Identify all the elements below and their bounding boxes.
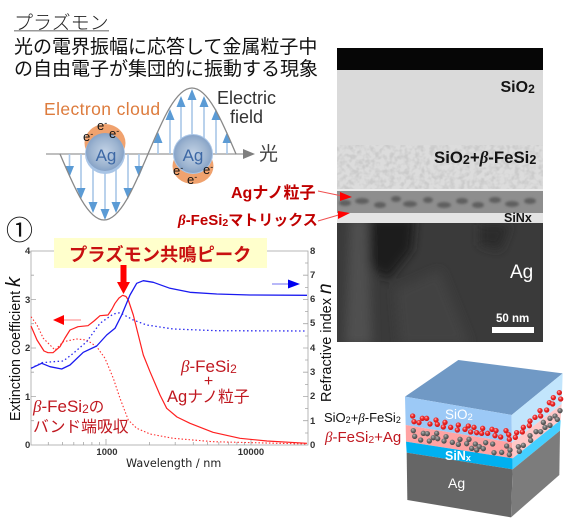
TEM layer labels: β-FeSi — [480, 148, 529, 167]
annotation: beta-FeSi2 + Ag nanoparticles: Agナノ粒子 — [167, 384, 250, 407]
3D layer stack diagram — [324, 360, 563, 517]
tick labels — [25, 246, 316, 458]
annotation: band edge absorption — [32, 395, 129, 437]
annotation: band edge absorption: 2 — [82, 402, 89, 416]
Ag particle right — [172, 134, 214, 187]
electric field label: field — [230, 107, 263, 127]
layer label: SiO2 + beta-FeSi2: β-FeSi — [358, 410, 396, 425]
left pointing red arrow — [53, 315, 81, 325]
scale bar: 50 nm — [496, 313, 529, 325]
tick labels: 1 — [25, 392, 31, 403]
tick labels: 2 — [25, 343, 30, 354]
tick labels: 6 — [310, 294, 315, 305]
text block: plasmon definition — [14, 32, 318, 81]
layer label: SiO2 + beta-FeSi2: 2 — [346, 415, 351, 425]
gray particles — [411, 408, 563, 457]
right pointing blue arrow — [272, 280, 300, 288]
Ag particle left — [83, 118, 126, 174]
layer label: beta-FeSi2 + Ag: +Ag — [374, 429, 401, 446]
Ag particle left: e — [83, 129, 90, 144]
sine wave — [60, 88, 236, 220]
SiO2 layer label: 2 — [468, 412, 473, 423]
layer label: SiO2 + beta-FeSi2: 2 — [396, 415, 401, 425]
y axis title right: Refractive index n — [315, 283, 336, 402]
tick labels: 4 — [310, 343, 316, 354]
tick labels: 0 — [25, 440, 30, 451]
Ag particle right: e — [187, 172, 194, 187]
Ag particle left: e — [97, 118, 104, 133]
TEM layer labels: + — [470, 148, 480, 167]
peak arrow — [117, 265, 130, 294]
annotation: beta-FeSi2 + Ag nanoparticles: 2 — [230, 362, 237, 376]
right face layers — [512, 373, 563, 443]
tick labels: 3 — [310, 367, 315, 378]
curve: red solid k — [31, 295, 307, 443]
Ag particle left: - — [90, 129, 93, 139]
callout: nanoparticle and matrix labels with arrows: 2 — [222, 217, 228, 229]
callout: nanoparticle and matrix labels with arrows: マトリックス — [228, 209, 318, 230]
TEM micrograph — [337, 48, 543, 345]
annotation: beta-FeSi2 + Ag nanoparticles: β-FeSi — [181, 357, 230, 376]
Ag particle right: - — [194, 172, 197, 182]
TEM layer labels: SiO — [434, 148, 463, 167]
Ag particle right: - — [180, 163, 183, 173]
annotation: band edge absorption: バンド端吸収 — [33, 414, 129, 437]
curve: blue dotted n — [31, 313, 307, 368]
Ag particle right: e — [173, 163, 180, 178]
circled number: ① — [6, 209, 33, 248]
tick labels: 1000 — [96, 447, 118, 458]
electron cloud label: Electron cloud — [44, 99, 160, 119]
layer label: SiO2 + beta-FeSi2: + — [351, 410, 358, 425]
TEM layer labels: 2 — [463, 153, 470, 167]
annotation: beta-FeSi2 + Ag nanoparticles — [167, 357, 250, 407]
layer label: beta-FeSi2 + Ag: 2 — [368, 434, 374, 446]
callout: nanoparticle and matrix labels with arrows — [177, 179, 352, 230]
tick labels: 10000 — [238, 447, 264, 458]
TEM layer labels: SiO — [500, 79, 528, 96]
annotation: beta-FeSi2 + Ag nanoparticles: + — [204, 373, 213, 390]
Ag particle right: - — [210, 162, 213, 172]
top face — [405, 360, 563, 415]
Ag particle left: - — [116, 126, 119, 136]
axes — [31, 251, 308, 445]
front face layers — [405, 397, 512, 443]
scale bar — [492, 313, 534, 333]
Ag particle left: e — [109, 126, 116, 141]
text block: plasmon definition: の自由電子が集団的に振動する現象 — [14, 54, 318, 81]
Ag particle right: e — [203, 162, 210, 177]
title: プラズモン — [14, 8, 109, 35]
curves — [31, 281, 307, 444]
TEM layer labels: SiNx — [504, 211, 532, 225]
callout: plasmon resonance peak: プラズモン共鳴ピーク — [69, 241, 251, 267]
annotation: band edge absorption: β-FeSi — [33, 397, 82, 416]
layer label: beta-FeSi2 + Ag: β-FeSi — [325, 429, 368, 446]
curve: red dotted k — [31, 317, 307, 444]
electric field label — [217, 88, 276, 127]
tick labels: 7 — [310, 270, 315, 281]
layer label: SiO2 + beta-FeSi2: SiO — [324, 410, 346, 425]
tick labels: 0 — [310, 440, 315, 451]
Ag label: Ag — [510, 262, 533, 283]
light label: 光 — [259, 139, 278, 166]
Ag particle left: - — [104, 118, 107, 128]
SiNx layer label: x — [466, 453, 471, 463]
light axis arrow — [46, 149, 255, 159]
tick labels: 5 — [310, 318, 316, 329]
Ag particle right: Ag — [183, 146, 203, 165]
TEM layer labels: 2 — [528, 82, 535, 96]
callout: nanoparticle and matrix labels with arrows: β-FeSi — [178, 212, 222, 229]
chart: extinction coefficient and refractive index vs wavelength — [3, 238, 336, 470]
SiO2 layer label: SiO — [445, 407, 468, 422]
callout: nanoparticle and matrix labels with arrows: Agナノ粒子 — [231, 179, 316, 203]
tick labels: 2 — [310, 391, 315, 402]
x axis title: Wavelength / nm — [126, 457, 221, 470]
tick labels: 3 — [25, 295, 30, 306]
TEM layer labels — [434, 79, 536, 225]
electric field label: Electric — [217, 88, 276, 108]
tick labels: 1 — [310, 416, 316, 427]
tick labels: 4 — [25, 246, 31, 257]
curve: blue solid n — [31, 281, 307, 369]
electric field arrows — [65, 89, 232, 220]
Ag layer label: Ag — [448, 475, 465, 491]
annotation: band edge absorption: の — [89, 395, 104, 417]
diagram: electric field wave and Ag particles — [44, 88, 278, 220]
red particles — [410, 390, 563, 442]
TEM layer labels: 2 — [529, 153, 536, 167]
Ag particle left: Ag — [96, 146, 116, 165]
y axis title left: Extinction coefficient k — [3, 276, 25, 421]
tick labels: 8 — [310, 246, 315, 257]
text block: plasmon definition: 光の電界振幅に応答して金属粒子中 — [14, 32, 317, 59]
SiNx layer label: SiN — [445, 449, 466, 463]
